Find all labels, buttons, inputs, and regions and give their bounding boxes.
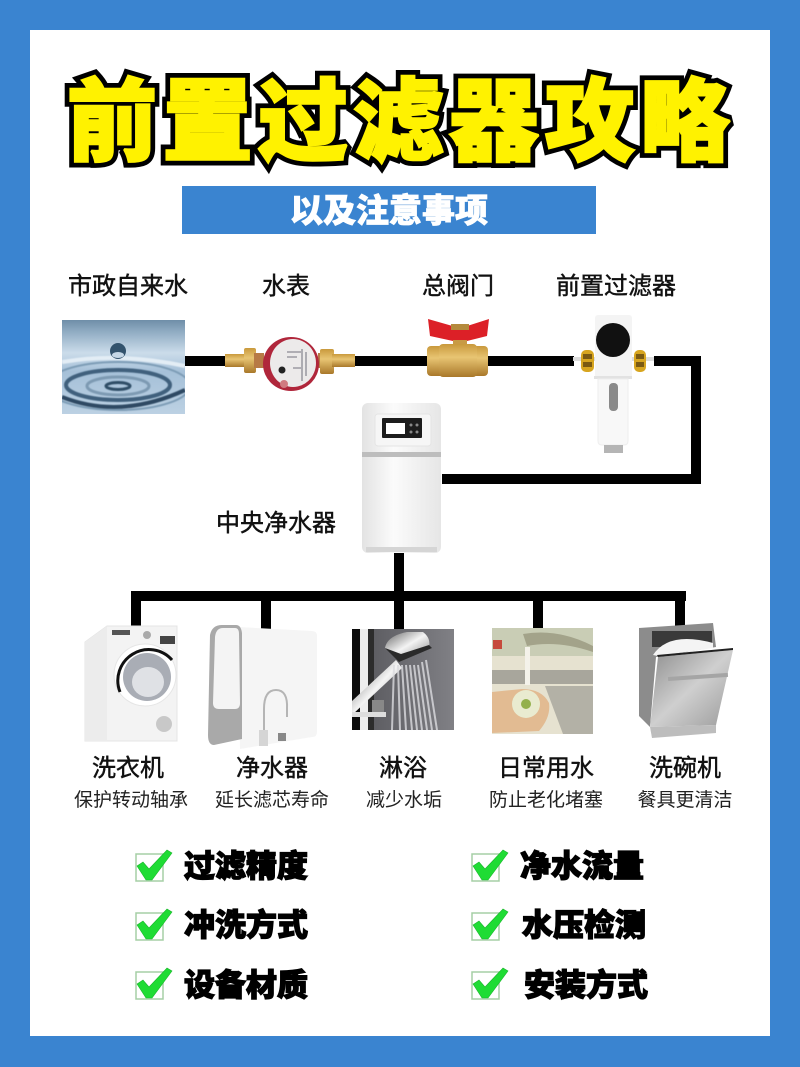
pipes: main line <box>185 356 701 484</box>
label: 洗碗机 <box>637 755 733 811</box>
label: 日常用水: 日常用水 <box>498 755 594 782</box>
label: 中央净水器: 中央净水器 <box>216 510 336 537</box>
image: shower <box>352 629 454 730</box>
label: 淋浴 <box>366 755 442 811</box>
checklist: 安装方式: 安装方式 <box>524 968 648 1003</box>
checklist: 过滤精度: 过滤精度 <box>184 849 308 884</box>
label: 净水器: 延长滤芯寿命 <box>215 789 329 811</box>
label: 净水器: 净水器 <box>236 755 308 782</box>
title: 前置过滤器攻略 <box>67 73 730 173</box>
icon: under-sink purifier <box>208 625 317 749</box>
label: 水表: 水表 <box>262 273 310 300</box>
checklist: 水压检测: 水压检测 <box>522 908 646 943</box>
label: 洗碗机: 餐具更清洁 <box>637 789 733 811</box>
label: 洗衣机: 保护转动轴承 <box>74 789 188 811</box>
icon: main ball valve <box>427 319 489 377</box>
label: 总阀门: 总阀门 <box>422 273 494 300</box>
icon: water meter <box>225 337 355 391</box>
label: 日常用水: 防止老化堵塞 <box>489 789 603 811</box>
label: 市政自来水: 市政自来水 <box>68 273 188 300</box>
subtitle banner <box>182 186 596 234</box>
checklist: 冲洗方式: 冲洗方式 <box>184 908 308 943</box>
image: kitchen sink with hands <box>492 628 593 734</box>
image: water drop ripple <box>62 320 185 414</box>
label: 前置过滤器: 前置过滤器 <box>556 273 676 300</box>
icon: washing machine <box>85 626 177 741</box>
checklist: 设备材质: 设备材质 <box>184 968 308 1003</box>
label: 洗衣机: 洗衣机 <box>92 755 164 782</box>
checklist: 净水流量: 净水流量 <box>520 849 644 884</box>
label: 洗衣机 <box>74 755 188 811</box>
icon: central water purifier <box>362 403 441 553</box>
icon: dishwasher <box>639 623 733 738</box>
label: 淋浴: 淋浴 <box>379 755 427 782</box>
label: 洗碗机: 洗碗机 <box>649 755 721 782</box>
subtitle banner: 以及注意事项 <box>290 192 488 229</box>
pipes: distribution tree <box>131 552 686 630</box>
icon: pre-filter <box>573 315 654 453</box>
title: 前置过滤器攻略 <box>67 73 730 173</box>
label: 日常用水 <box>489 755 603 811</box>
label: 净水器 <box>215 755 329 811</box>
label: 淋浴: 减少水垢 <box>366 789 442 811</box>
